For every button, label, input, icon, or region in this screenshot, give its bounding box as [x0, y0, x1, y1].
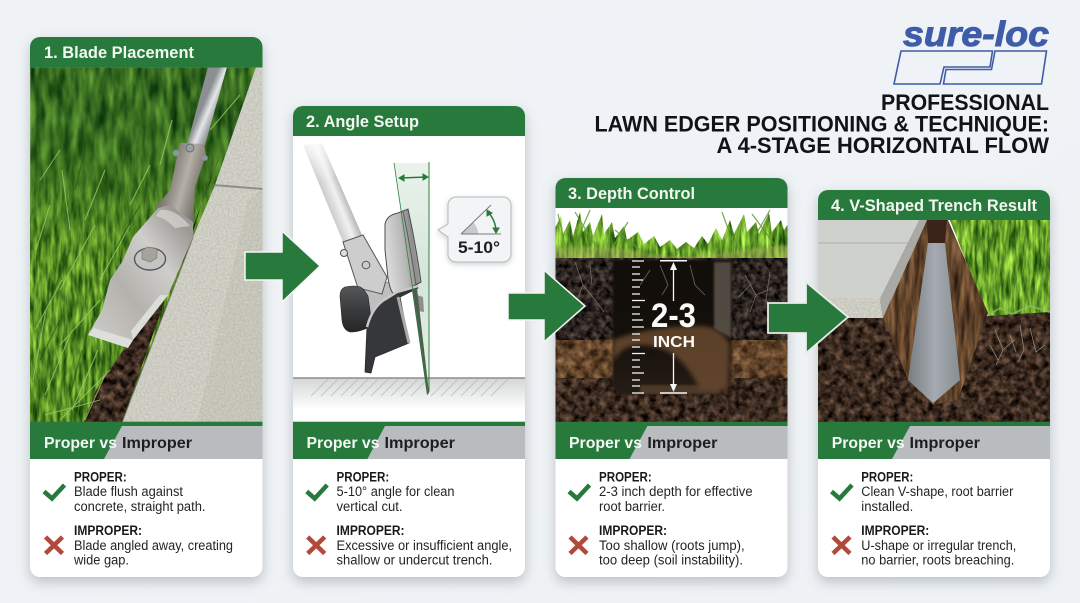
icon: red cross [570, 537, 587, 554]
text: proper note: concrete, straight path. [74, 499, 206, 514]
header: 1. Blade Placement [30, 37, 262, 68]
text: improper note: too deep (soil instability). [599, 552, 743, 568]
text: proper note: Clean V-shape, root barrier [861, 484, 1014, 499]
text: proper note: 2-3 inch depth for effective [599, 484, 753, 499]
header: 3. Depth Control [556, 178, 788, 208]
photo: v-shaped trench with root barrier [818, 220, 1050, 422]
logo: sure-loc: sure-loc [903, 15, 1049, 54]
text: proper note: vertical cut. [336, 499, 402, 514]
text: improper note [861, 523, 1016, 568]
band: proper vs improper: Improper [122, 435, 192, 452]
text: proper note: PROPER: [861, 470, 913, 484]
icon: green check [44, 485, 64, 498]
icon: red cross [833, 537, 850, 554]
label: 2-3 inch: INCH [653, 334, 695, 351]
photo: blade flush against concrete [30, 67, 263, 422]
icon: green check [832, 485, 852, 498]
title: PROFESSIONAL [881, 90, 1049, 115]
band: proper vs improper: Proper vs [832, 435, 905, 452]
panel: stage 4 v-shaped trench result [818, 190, 1050, 577]
text: improper note: IMPROPER: [74, 523, 142, 538]
band: proper vs improper [556, 422, 788, 459]
band: proper vs improper [30, 422, 262, 459]
text: proper note [599, 470, 753, 514]
text: proper note [336, 470, 454, 514]
header: 3. Depth Control: 3. Depth Control [568, 184, 695, 203]
band: proper vs improper: Improper [384, 435, 455, 452]
band: proper vs improper: Proper vs [569, 435, 642, 452]
band: proper vs improper [818, 422, 1050, 459]
label: 2-3 inch [652, 303, 695, 347]
text: proper note: PROPER: [74, 470, 127, 484]
text: proper note: Blade flush against [74, 484, 183, 499]
text: improper note: Excessive or insufficient angle, [336, 538, 512, 553]
band: proper vs improper: Improper [647, 435, 717, 452]
text: improper note: IMPROPER: [861, 523, 929, 538]
diagram: edger at 5-10 degree angle [293, 138, 525, 410]
band: proper vs improper: Proper vs [306, 435, 380, 452]
text: improper note: wide gap. [73, 552, 129, 568]
panel: stage 1 blade placement [30, 37, 263, 577]
icon: red cross [46, 537, 62, 554]
text: proper note: 5-10° angle for clean [336, 484, 454, 499]
arrow: stage 3 to 4 [768, 282, 848, 353]
callout: 5-10 degree angle [438, 197, 511, 262]
header: 2. Angle Setup: 2. Angle Setup [306, 112, 419, 131]
band: proper vs improper: Proper vs [44, 435, 117, 452]
header: 1. Blade Placement: 1. Blade Placement [44, 43, 194, 62]
icon: green check [569, 485, 590, 498]
title: LAWN EDGER POSITIONING & TECHNIQUE: [594, 112, 1049, 136]
panel: stage 2 angle setup [293, 106, 525, 577]
text: improper note: shallow or undercut trench. [336, 552, 492, 568]
arrow: stage 2 to 3 [508, 270, 585, 342]
text: improper note [599, 523, 745, 568]
arrow: stage 1 to 2 [245, 231, 320, 302]
text: proper note [74, 470, 206, 514]
logo: sure-loc [894, 15, 1049, 84]
icon: red cross [308, 537, 325, 554]
text: proper note: installed. [861, 499, 913, 514]
text: improper note: no barrier, roots breaching. [861, 552, 1014, 568]
header: 4. V-Shaped Trench Result [818, 190, 1050, 220]
text: improper note: Too shallow (roots jump), [599, 538, 745, 553]
icon: edger shaft and blade [88, 67, 227, 348]
arrow: depth dimension [660, 261, 687, 393]
band: proper vs improper: Improper [910, 435, 980, 452]
photo: soil cross-section with 2-3 inch trench [555, 208, 788, 422]
icon: green check [307, 485, 327, 498]
text: proper note: PROPER: [599, 470, 652, 484]
text: improper note: Blade angled away, creating [74, 538, 233, 553]
text: proper note [861, 470, 1014, 514]
text: improper note: IMPROPER: [336, 523, 404, 538]
ruler: depth ticks [632, 261, 645, 393]
text: improper note: IMPROPER: [599, 523, 667, 538]
text: proper note: root barrier. [599, 499, 665, 514]
band: proper vs improper [293, 422, 525, 459]
header: 2. Angle Setup [293, 106, 525, 136]
text: proper note: PROPER: [336, 470, 389, 484]
text: improper note [73, 523, 233, 568]
panel: stage 3 depth control [555, 178, 788, 577]
label: 2-3 inch: 2-3 [651, 297, 696, 335]
text: improper note: U-shape or irregular trench, [861, 538, 1016, 553]
title [594, 90, 1049, 158]
header: 4. V-Shaped Trench Result: 4. V-Shaped Trench Result [831, 196, 1037, 215]
callout: 5-10 degree angle: 5-10° [458, 238, 500, 257]
text: improper note [336, 523, 512, 568]
title: A 4-STAGE HORIZONTAL FLOW [716, 133, 1049, 158]
